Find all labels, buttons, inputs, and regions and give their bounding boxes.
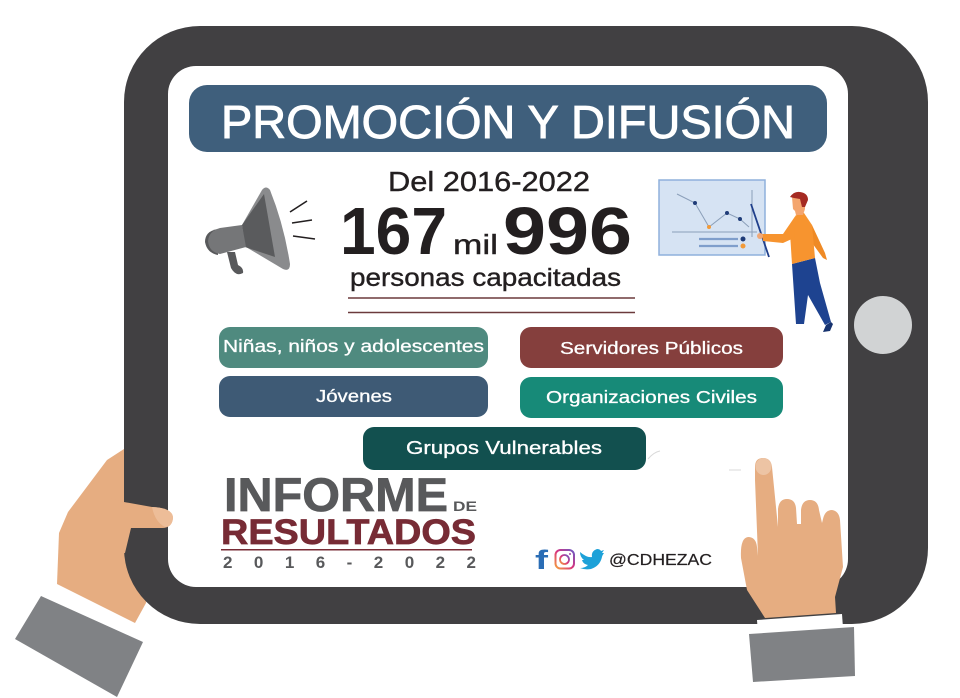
years: 2016-2022	[223, 553, 476, 572]
icon: instagram	[556, 550, 574, 568]
thumb nail	[152, 507, 173, 527]
presenter head	[792, 197, 805, 215]
chart board	[659, 180, 765, 255]
pill label: Servidores Públicos	[560, 338, 743, 358]
pill: youth	[219, 376, 488, 417]
presenter hair	[790, 192, 808, 207]
right cuff	[757, 614, 843, 634]
left thumb	[110, 498, 173, 553]
megaphone body	[208, 225, 246, 254]
presenter back arm	[806, 222, 827, 260]
left palm	[57, 449, 150, 623]
pill label: Jóvenes	[316, 386, 392, 406]
pill label: Niñas, niños y adolescentes	[223, 336, 484, 356]
social media handles	[535, 545, 712, 575]
handle text: @CDHEZAC	[609, 552, 712, 569]
mil: mil	[453, 229, 498, 260]
996: 996	[503, 194, 632, 269]
date range: Del 2016-2022	[388, 166, 590, 197]
double rule	[348, 298, 635, 312]
presenter torso	[790, 213, 815, 264]
chart points	[693, 201, 742, 229]
icon: twitter	[580, 549, 604, 569]
right hand pointing	[741, 458, 855, 682]
megaphone cone interior	[242, 194, 275, 257]
left sleeve	[15, 596, 143, 697]
INFORME: INFORME	[224, 468, 448, 521]
title text: PROMOCIÓN Y DIFUSIÓN	[221, 96, 795, 148]
megaphone cone	[242, 188, 290, 270]
tablet screen	[168, 66, 848, 587]
fingertip nail	[756, 458, 772, 475]
pill: children	[219, 327, 488, 368]
sound rays	[290, 201, 315, 239]
title banner	[189, 85, 827, 152]
pill: civil organizations	[520, 377, 783, 418]
illustration: presenter with chart	[659, 180, 833, 332]
icon: facebook: f	[535, 545, 549, 575]
logo rule	[221, 549, 472, 550]
left hand holding the tablet	[15, 449, 150, 697]
icon: megaphone	[205, 188, 315, 274]
presenter shoe	[823, 322, 833, 332]
pointer stick	[751, 204, 769, 257]
RESULTADOS: RESULTADOS	[221, 513, 476, 552]
report logo	[221, 468, 477, 572]
megaphone handle	[227, 252, 243, 274]
megaphone back shadow	[205, 229, 218, 255]
right sleeve	[749, 627, 855, 682]
167: 167	[340, 194, 447, 269]
right hand shape	[741, 458, 843, 618]
presenter hand	[757, 233, 763, 239]
chart lines	[672, 190, 757, 237]
pill label: Organizaciones Civiles	[546, 387, 757, 407]
tablet frame	[124, 26, 928, 624]
presenter front arm	[762, 215, 796, 243]
tablet home button	[854, 296, 912, 354]
presenter trousers	[792, 258, 831, 325]
big number	[340, 194, 632, 269]
pill: public servants	[520, 327, 783, 368]
chart legend	[699, 236, 746, 248]
pill: vulnerable groups	[363, 427, 646, 470]
DE: DE	[453, 498, 477, 514]
subtitle: personas capacitadas	[350, 264, 621, 292]
pill label: Grupos Vulnerables	[406, 438, 602, 458]
